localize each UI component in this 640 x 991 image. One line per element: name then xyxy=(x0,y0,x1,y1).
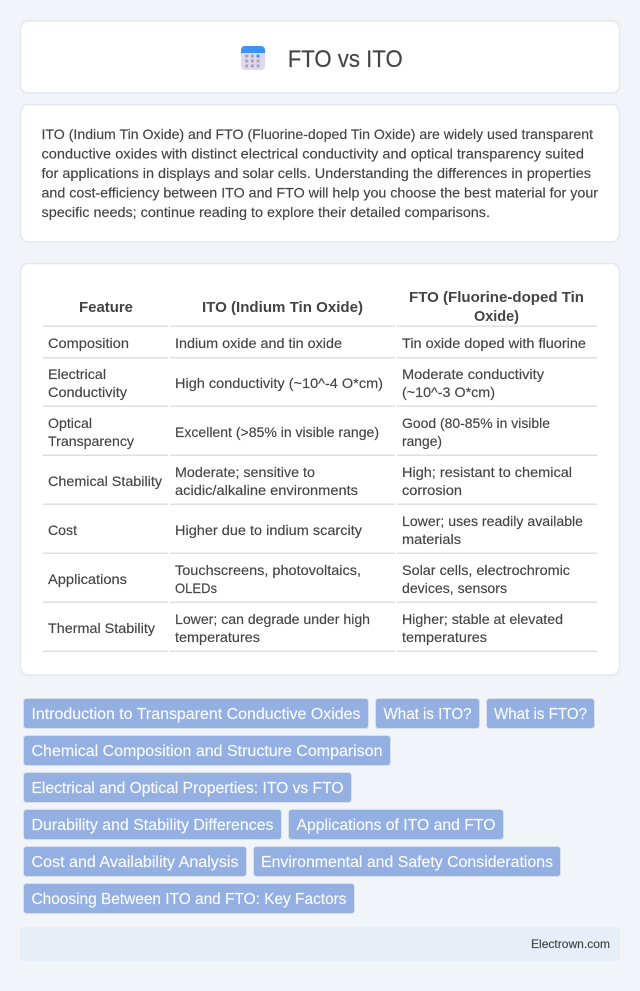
title: FTO vs ITO xyxy=(288,46,403,73)
tag: what is ITO xyxy=(376,698,480,728)
tag: what is FTO xyxy=(486,698,594,728)
icon: calendar xyxy=(241,46,265,70)
panel: topic tags xyxy=(24,698,594,914)
table header: Oxide) xyxy=(474,308,519,325)
row: applications: Solar cells, electrochromic xyxy=(402,562,570,578)
row: composition: Tin oxide doped with fluorine xyxy=(402,335,586,351)
intro text: and cost-efficiency between ITO and FTO will help you choose the best material for your xyxy=(42,184,598,200)
row: optical transparency: Transparency xyxy=(48,433,134,449)
row: cost xyxy=(48,513,583,547)
row: electrical conductivity: High conductivity (~10^-4 O*cm) xyxy=(175,375,383,391)
row: electrical conductivity: (~10^-3 O*cm) xyxy=(402,384,495,400)
row: thermal stability xyxy=(48,611,563,645)
footer: Electrown.com xyxy=(531,937,610,951)
table header: ITO (Indium Tin Oxide) xyxy=(202,299,363,316)
tag: applications xyxy=(288,810,504,840)
row: composition: Composition xyxy=(48,335,129,351)
row: cost: Higher due to indium scarcity xyxy=(175,522,362,538)
row: thermal stability: temperatures xyxy=(175,629,260,645)
tag: durability: Durability and Stability Differences xyxy=(32,817,274,834)
row: applications: OLEDs xyxy=(175,580,217,596)
row: electrical conductivity: Moderate conductivity xyxy=(402,366,544,382)
intro text xyxy=(42,126,598,220)
tag: choosing: Choosing Between ITO and FTO: Key Factors xyxy=(32,891,346,908)
panel: header xyxy=(20,21,620,93)
row: optical transparency: Excellent (>85% in visible range) xyxy=(175,424,379,440)
tag: choosing xyxy=(24,884,354,914)
row: thermal stability: Lower; can degrade under high xyxy=(175,611,370,627)
row: cost: Cost xyxy=(48,522,77,538)
row: optical transparency: Optical xyxy=(48,415,92,431)
row: chemical stability: acidic/alkaline environments xyxy=(175,482,358,498)
intro text: ITO (Indium Tin Oxide) and FTO (Fluorine-doped Tin Oxide) are widely used transparent xyxy=(42,126,593,142)
row: applications: Touchscreens, photovoltaics, xyxy=(175,562,361,578)
tag: environmental xyxy=(254,846,560,876)
tag: introduction: Introduction to Transparent Conductive Oxides xyxy=(32,706,360,723)
row: chemical stability: High; resistant to chemical xyxy=(402,464,572,480)
row: optical transparency xyxy=(48,415,550,449)
row: electrical conductivity xyxy=(48,366,544,400)
panel: introduction xyxy=(20,104,620,242)
row: cost: materials xyxy=(402,531,461,547)
row: thermal stability: temperatures xyxy=(402,629,487,645)
row: cost: Lower; uses readily available xyxy=(402,513,583,529)
tag: electrical and optical: Electrical and Optical Properties: ITO vs FTO xyxy=(32,780,344,797)
tag: cost xyxy=(24,846,246,876)
tag: introduction xyxy=(24,698,368,728)
tag: electrical and optical xyxy=(24,772,352,802)
row: chemical stability xyxy=(48,464,572,498)
intro text: specific needs; continue reading to explore their detailed comparisons. xyxy=(42,204,490,220)
table header: FTO (Fluorine-doped Tin xyxy=(409,289,584,306)
row: chemical stability: Chemical Stability xyxy=(48,473,162,489)
row: applications: Applications xyxy=(48,571,127,587)
tag: cost: Cost and Availability Analysis xyxy=(32,854,238,871)
row: electrical conductivity: Electrical xyxy=(48,366,106,382)
row: applications xyxy=(48,562,570,596)
row: optical transparency: Good (80-85% in visible xyxy=(402,415,550,431)
row: electrical conductivity: Conductivity xyxy=(48,384,127,400)
row: thermal stability: Thermal Stability xyxy=(48,620,155,636)
panel: comparison table xyxy=(20,264,620,675)
tag: applications: Applications of ITO and FTO xyxy=(296,817,496,834)
table header xyxy=(79,289,584,325)
row: composition: Indium oxide and tin oxide xyxy=(175,335,342,351)
tag: chemical composition: Chemical Composition and Structure Comparison xyxy=(32,743,382,760)
tag: what is FTO: What is FTO? xyxy=(494,706,587,723)
tag: chemical composition xyxy=(24,736,390,766)
row: thermal stability: Higher; stable at elevated xyxy=(402,611,563,627)
row: chemical stability: Moderate; sensitive to xyxy=(175,464,315,480)
tag: what is ITO: What is ITO? xyxy=(384,706,472,723)
row: applications: devices, sensors xyxy=(402,580,507,596)
table header: Feature xyxy=(79,299,133,316)
intro text: for applications in displays and solar cells. Understanding the differences in properties xyxy=(42,165,591,181)
intro text: conductive oxides with distinct electrical conductivity and optical transparency suited xyxy=(42,146,584,162)
row: optical transparency: range) xyxy=(402,433,442,449)
row: composition xyxy=(48,335,586,351)
footer xyxy=(20,927,620,961)
tag: durability xyxy=(24,810,282,840)
tag: environmental: Environmental and Safety Considerations xyxy=(261,854,553,871)
row: chemical stability: corrosion xyxy=(402,482,462,498)
